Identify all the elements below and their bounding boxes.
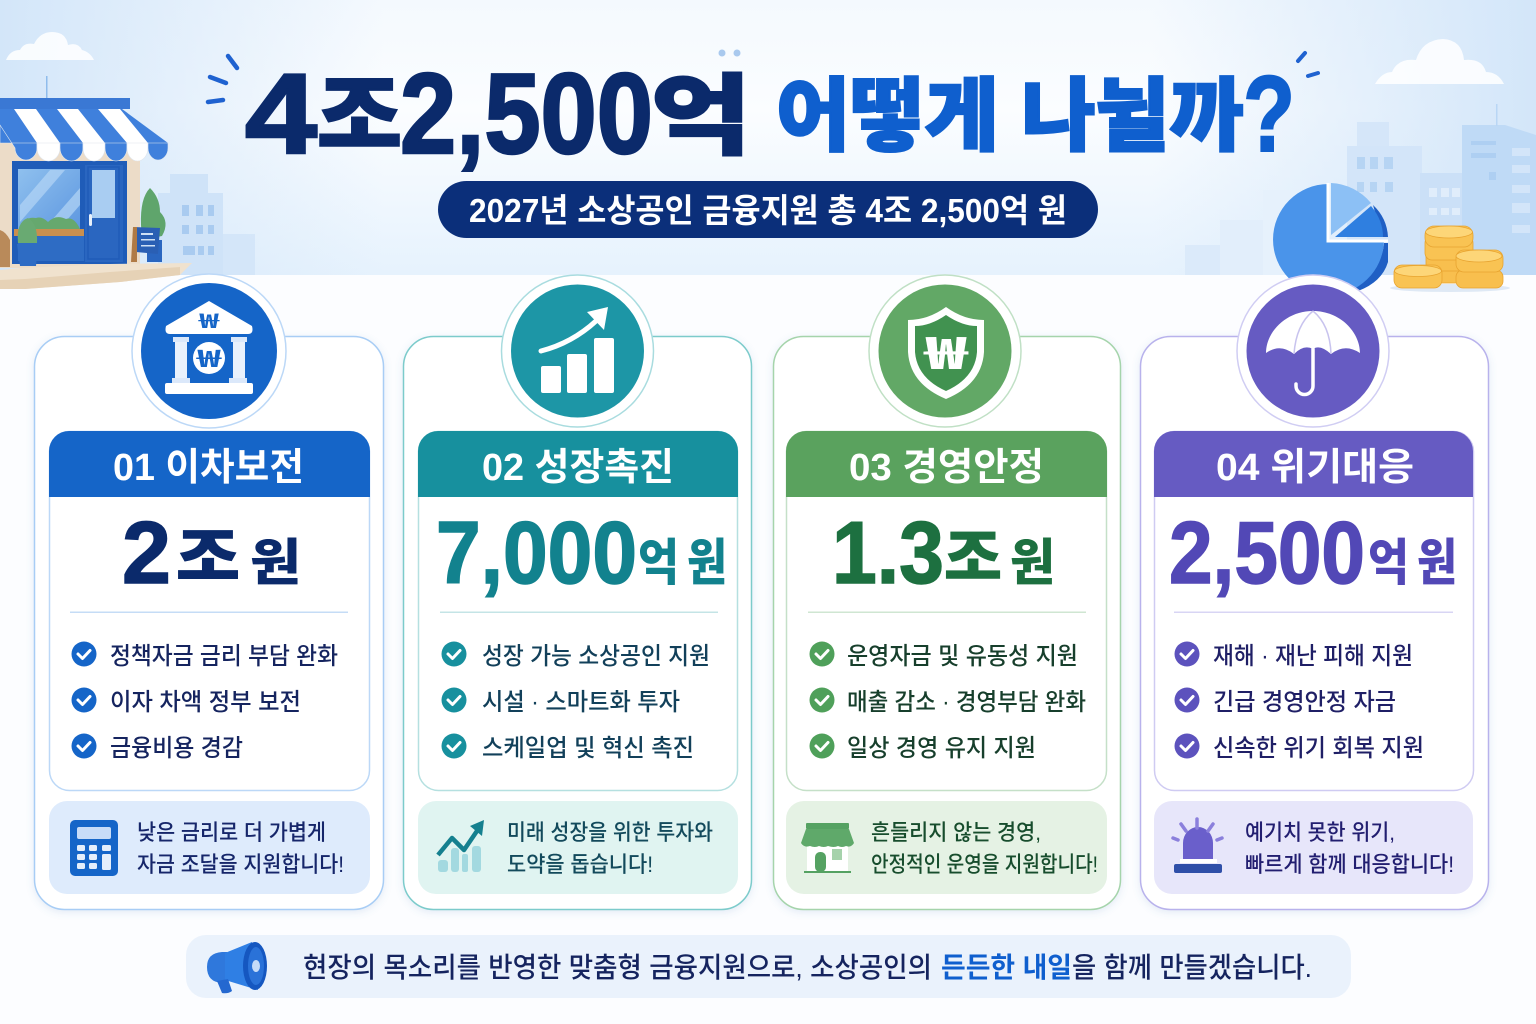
amount bbox=[832, 503, 1055, 602]
checklist: 정책자금 금리 부담 완화 bbox=[110, 643, 338, 670]
bottom message bar bbox=[186, 935, 1351, 998]
title: 억 bbox=[651, 67, 751, 166]
icon: small shop bbox=[801, 823, 854, 873]
panel: 01 이차보전 bbox=[34, 274, 384, 910]
callout: 빠르게 함께 대응합니다! bbox=[1245, 852, 1454, 877]
skyline left bbox=[158, 174, 255, 275]
amount: 2 bbox=[122, 503, 171, 602]
icon: calculator bbox=[70, 820, 118, 876]
bottom message bar: 을 함께 만들겠습니다. bbox=[1072, 952, 1312, 983]
illustration: pie chart bbox=[1273, 183, 1388, 295]
accent lines bbox=[208, 53, 1318, 102]
title: 조 bbox=[317, 69, 402, 165]
panel: 02 성장촉진 bbox=[404, 275, 752, 910]
icon: bank: ₩ bbox=[195, 339, 222, 374]
callout: 도약을 돕습니다! bbox=[507, 852, 653, 877]
checklist: 시설 · 스마트화 투자 bbox=[482, 689, 680, 716]
category header: 01 이차보전 bbox=[113, 447, 304, 489]
checklist: 금융비용 경감 bbox=[110, 735, 243, 762]
amount: 원 bbox=[1010, 535, 1055, 591]
category header bbox=[49, 431, 370, 497]
icon: bank: ₩ bbox=[197, 305, 221, 334]
panel: 04 위기대응 bbox=[1140, 275, 1488, 910]
amount: 1.3 bbox=[832, 503, 944, 602]
checklist: 신속한 위기 회복 지원 bbox=[1213, 735, 1424, 762]
icon: umbrella bbox=[1237, 275, 1389, 427]
icon: rising trend bbox=[438, 820, 484, 872]
checklist bbox=[72, 642, 338, 762]
title bbox=[245, 51, 1295, 178]
category header bbox=[1154, 431, 1473, 497]
cloud left bbox=[6, 32, 94, 60]
illustration: coins bbox=[1390, 226, 1510, 292]
icon: bank bbox=[132, 274, 286, 428]
checklist: 스케일업 및 혁신 촉진 bbox=[482, 735, 694, 762]
amount bbox=[122, 503, 301, 602]
amount: 원 bbox=[687, 535, 727, 591]
callout: 흔들리지 않는 경영, bbox=[871, 820, 1041, 845]
category header: 03 경영안정 bbox=[849, 447, 1044, 489]
checklist: 긴급 경영안정 자금 bbox=[1213, 689, 1396, 716]
panel: 03 경영안정 bbox=[774, 275, 1120, 910]
amount: 7,000 bbox=[436, 503, 637, 602]
checklist bbox=[442, 642, 710, 762]
subtitle pill: 2027년 소상공인 금융지원 총 4조 2,500억 원 bbox=[469, 192, 1067, 229]
callout bbox=[418, 801, 738, 894]
category header bbox=[786, 431, 1107, 497]
callout: 낮은 금리로 더 가볍게 bbox=[137, 820, 326, 845]
checklist: 일상 경영 유지 지원 bbox=[847, 735, 1036, 762]
icon: megaphone bbox=[207, 942, 267, 993]
subtitle pill bbox=[438, 181, 1098, 238]
skyline right bbox=[1185, 104, 1536, 275]
checklist: 성장 가능 소상공인 지원 bbox=[482, 643, 710, 670]
title: ? bbox=[1243, 53, 1295, 174]
bottom message bar: 현장의 목소리를 반영한 맞춤형 금융지원으로, 소상공인의 bbox=[303, 952, 932, 983]
bottom message bar: 든든한 내일 bbox=[941, 952, 1072, 983]
checklist: 운영자금 및 유동성 지원 bbox=[847, 643, 1078, 670]
amount: 억 bbox=[638, 535, 679, 591]
callout bbox=[49, 801, 370, 894]
icon: siren bbox=[1173, 819, 1222, 873]
checklist: 이자 차액 정부 보전 bbox=[110, 689, 301, 716]
callout: 미래 성장을 위한 투자와 bbox=[507, 820, 713, 845]
amount: 원 bbox=[250, 535, 301, 591]
amount: 조 bbox=[944, 525, 1002, 592]
amount: 조 bbox=[176, 524, 240, 593]
callout: 자금 조달을 지원합니다! bbox=[137, 852, 344, 877]
illustration: storefront bbox=[0, 76, 192, 289]
checklist: 매출 감소 · 경영부담 완화 bbox=[847, 689, 1086, 716]
checklist bbox=[1174, 642, 1424, 762]
callout: 안정적인 운영을 지원합니다! bbox=[871, 852, 1098, 877]
icon: growth chart bbox=[502, 275, 654, 427]
title: 어떻게 나뉠까 bbox=[776, 72, 1244, 161]
cloud right bbox=[1375, 39, 1504, 84]
category header: 04 위기대응 bbox=[1216, 447, 1414, 489]
category header bbox=[418, 431, 738, 497]
accent dots bbox=[718, 50, 740, 56]
checklist bbox=[810, 642, 1086, 762]
callout: 예기치 못한 위기, bbox=[1245, 820, 1395, 845]
title: 2,500 bbox=[400, 51, 653, 178]
title: 4 bbox=[245, 51, 317, 178]
header background bbox=[0, 0, 1536, 275]
icon: shield bbox=[869, 275, 1021, 427]
icon: shield: ₩ bbox=[923, 318, 969, 382]
callout bbox=[1154, 801, 1473, 894]
amount: 억 bbox=[1368, 535, 1409, 591]
checklist: 재해 · 재난 피해 지원 bbox=[1213, 643, 1413, 670]
category header: 02 성장촉진 bbox=[482, 447, 674, 489]
amount: 2,500 bbox=[1169, 503, 1365, 602]
callout bbox=[786, 801, 1107, 894]
amount: 원 bbox=[1417, 535, 1457, 591]
